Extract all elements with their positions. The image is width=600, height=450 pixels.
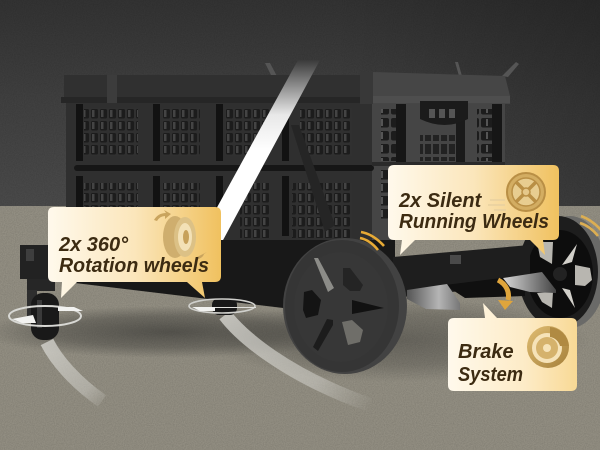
callout text: 2x Silent (398, 190, 483, 212)
callout: brake system: System (458, 364, 523, 386)
callout: 2x 360 rotation wheels: Rotation wheels (59, 255, 209, 277)
white wheel tracks (47, 315, 370, 405)
end panel vents (381, 109, 396, 161)
crate body side (66, 100, 374, 240)
callout text: Brake (458, 341, 514, 363)
second caster (189, 298, 256, 315)
brake pedal right plate (503, 272, 556, 293)
white diagonal handle strut (198, 60, 320, 242)
end panel handle (420, 101, 468, 125)
axle housing (393, 245, 556, 310)
front wheel cutouts (303, 258, 384, 351)
icon: brake disc (527, 326, 569, 368)
orange sound arcs front wheel (360, 232, 384, 250)
brake direction arrow (498, 280, 513, 310)
callout text: 2x 360° (58, 234, 129, 256)
front left caster (9, 245, 83, 340)
icon: tire rotating (154, 210, 207, 260)
callout: 2x 360 rotation wheels (48, 207, 221, 298)
background wall (0, 0, 600, 215)
front wheel (283, 238, 407, 374)
crate end panel (372, 98, 505, 240)
swivel arrow ring (9, 306, 83, 326)
crate lid end (372, 72, 510, 104)
folding crate (61, 62, 519, 240)
callout: 2x silent running wheels: Running Wheels (399, 211, 549, 233)
crate lid side (61, 75, 372, 103)
orange sound arcs rear wheel (580, 216, 600, 236)
swivel arrow ring (189, 299, 256, 313)
rear wheel (518, 216, 600, 328)
dark rear strut (291, 125, 335, 232)
cart frame (62, 240, 395, 310)
crate hinge bar (74, 165, 374, 171)
rear wheel spokes (537, 242, 592, 308)
crate vent panels (76, 101, 502, 238)
callout: 2x silent running wheels (388, 165, 559, 255)
icon: spoked wheel (488, 173, 545, 211)
callout: brake system (448, 303, 577, 391)
faint rear rods (265, 62, 519, 97)
brake pedal left plate (407, 284, 460, 310)
